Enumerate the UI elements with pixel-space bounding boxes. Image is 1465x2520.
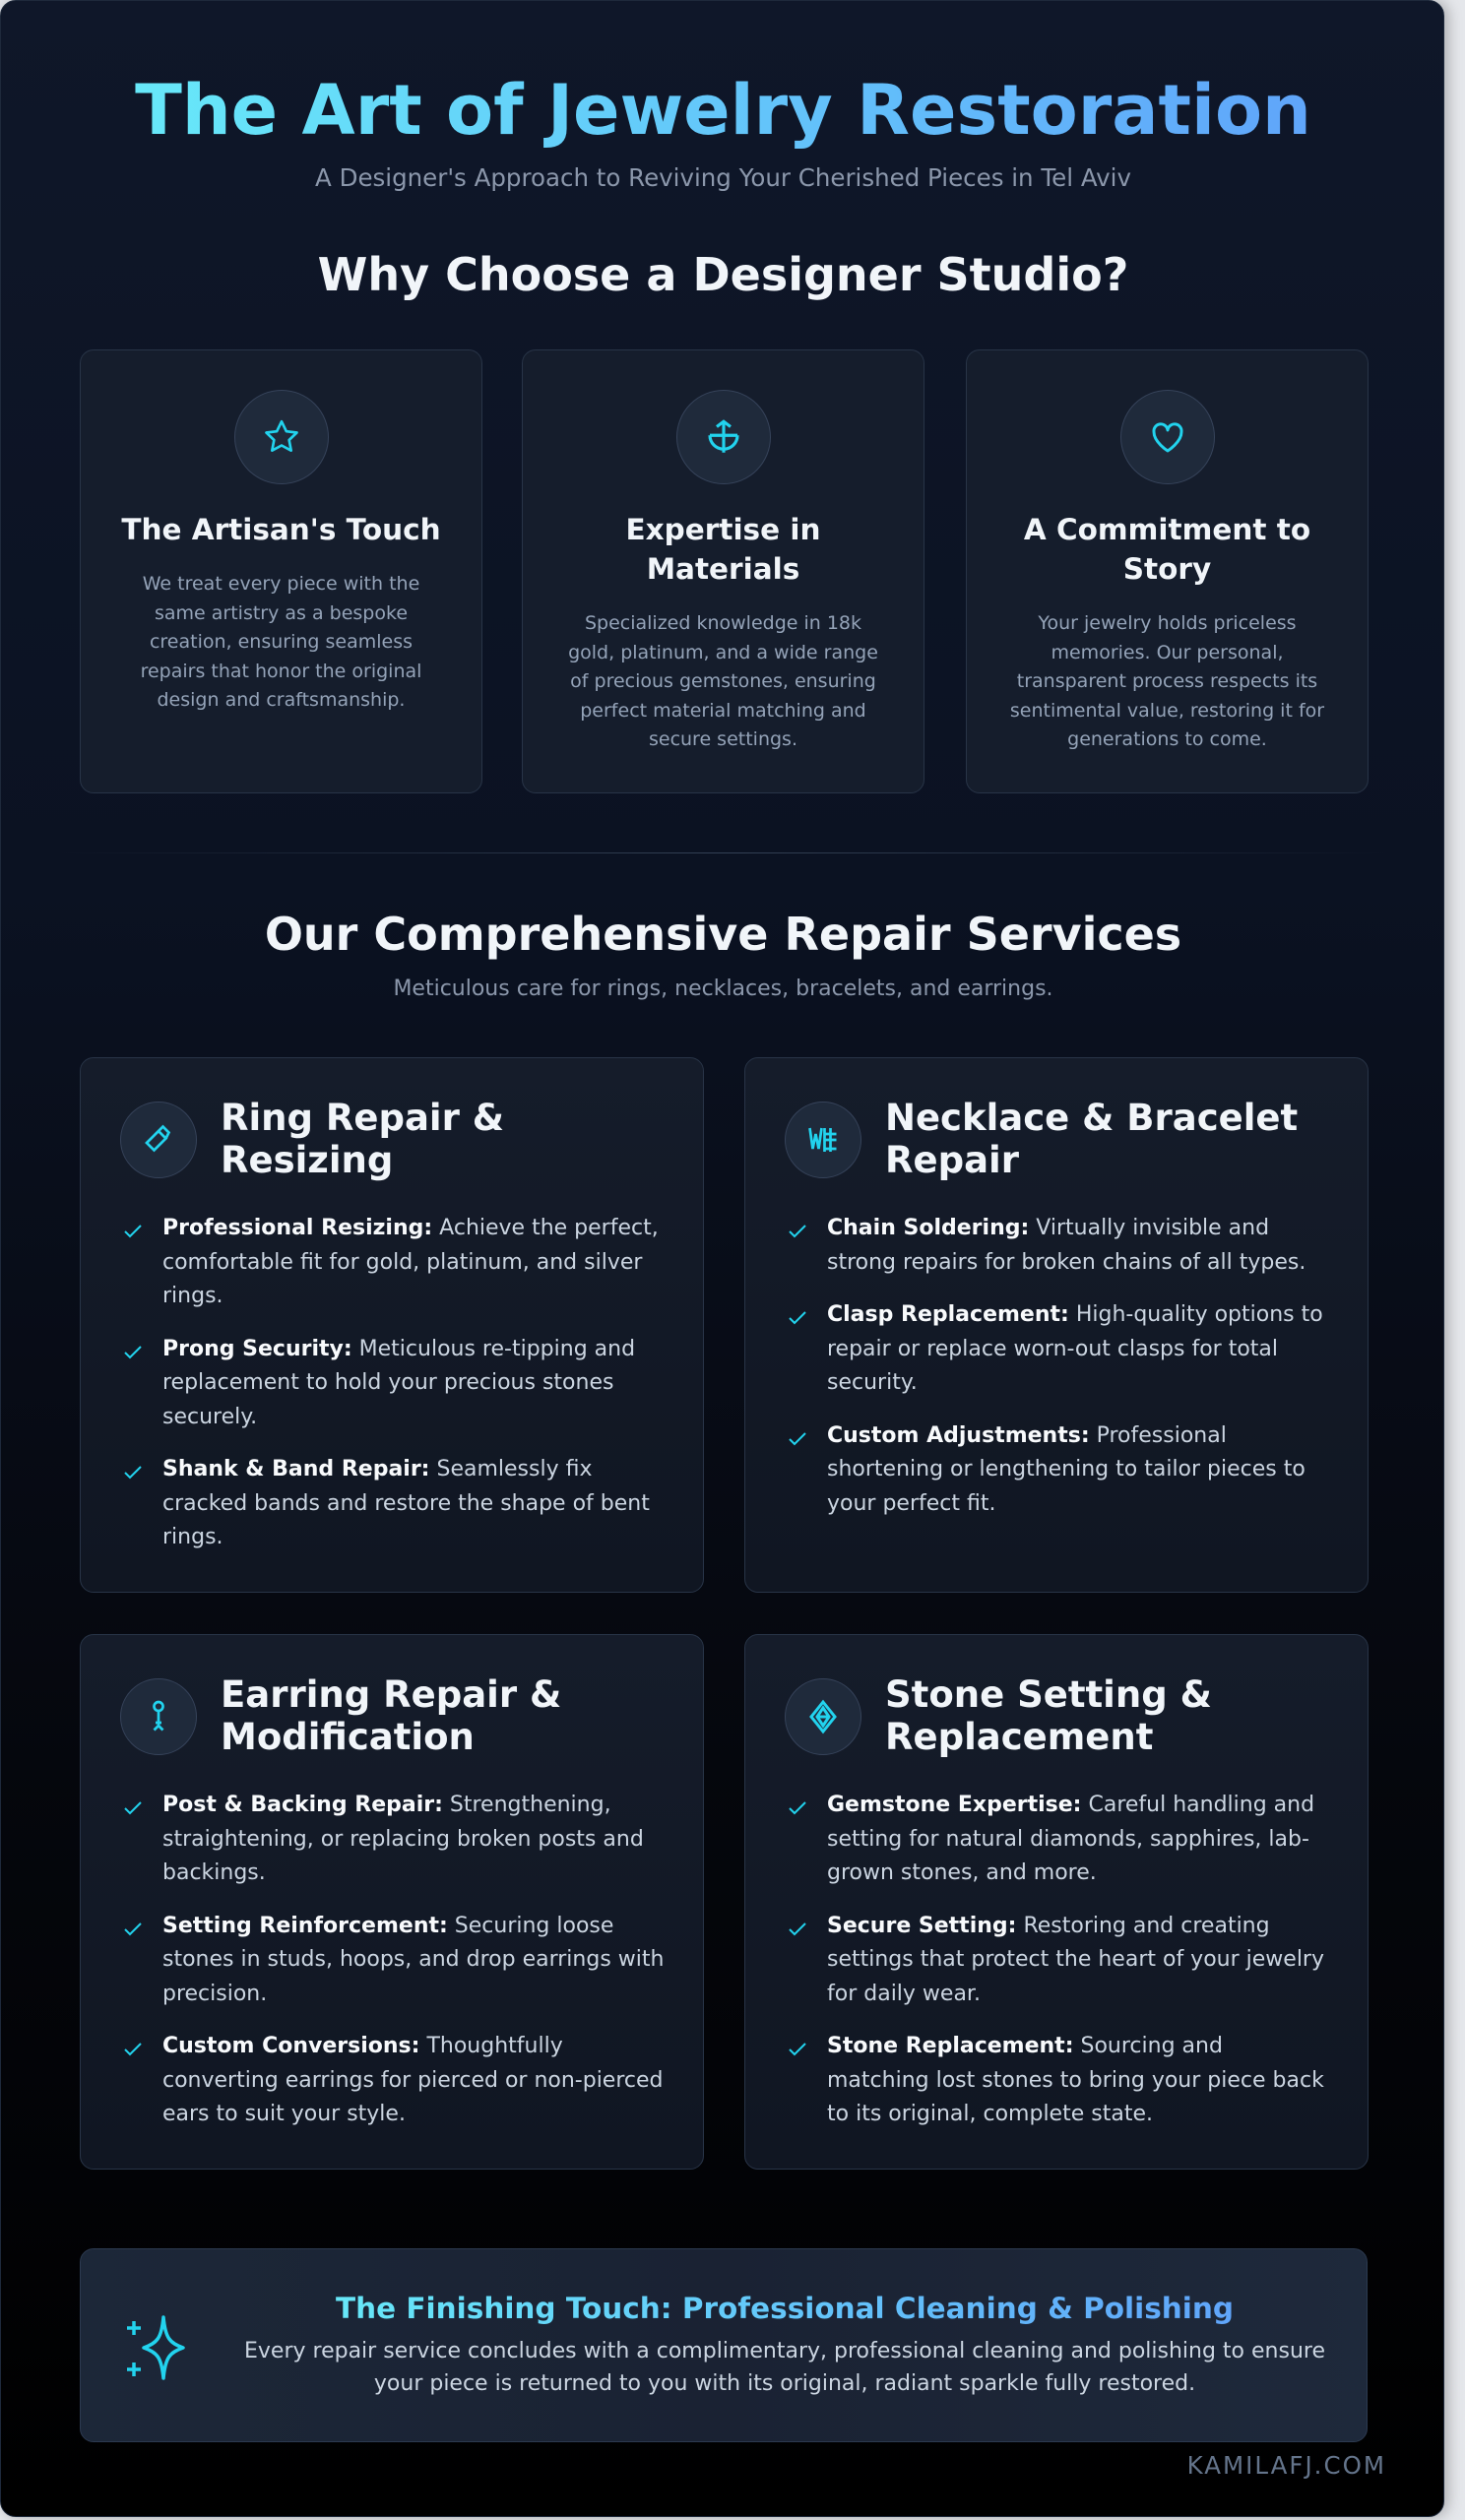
heading: why choose: Why Choose a Designer Studio? <box>318 248 1128 301</box>
panel: stone setting <box>744 1634 1369 2170</box>
services subtitle: Meticulous care for rings, necklaces, bracelets, and earrings. <box>393 976 1053 1001</box>
panel: ring repair: Shank & Band Repair: Seamlessly fix cracked bands and restore the shape of bent rings. <box>162 1457 650 1549</box>
footer: brand: KAMILAFJ.COM <box>1187 2451 1386 2480</box>
panel: earring repair: Earring Repair & Modification <box>221 1673 561 1758</box>
icon: gem <box>675 390 770 484</box>
panel: artisan's touch <box>80 349 482 793</box>
panel: artisan's touch: The Artisan's Touch <box>121 513 441 546</box>
panel: necklace repair: Custom Adjustments: Professional shortening or lengthening to tailor pieces to your perfect fit. <box>827 1423 1306 1516</box>
icon: diamond <box>785 1678 861 1755</box>
panel: stone setting: Gemstone Expertise: Careful handling and setting for natural diamonds, sapphires, lab-grown stones, and more. <box>827 1793 1314 1885</box>
heading: services: Our Comprehensive Repair Services <box>265 908 1181 961</box>
panel: expertise in materials <box>522 349 924 793</box>
panel: earring repair <box>80 1634 704 2170</box>
panel: expertise in materials: Specialized knowledge in 18k gold, platinum, and a wide range of precious gemstones, ensuring perfect material matching and secure settings. <box>568 612 878 750</box>
panel: commitment to story: Your jewelry holds priceless memories. Our personal, transparent process respects its sentimental value, restoring it for generations to come. <box>1010 612 1324 750</box>
panel: necklace repair <box>744 1057 1369 1593</box>
callout text: Every repair service concludes with a complimentary, professional cleaning and polishing to ensure your piece is returned to you with its original, radiant sparkle fully restored. <box>244 2339 1325 2396</box>
panel: stone setting: Stone Replacement: Sourcing and matching lost stones to bring your piece back to its original, complete state. <box>827 2034 1324 2126</box>
panel: expertise in materials: Expertise in Materials <box>625 513 821 586</box>
panel: commitment to story: A Commitment to Story <box>1024 513 1310 586</box>
icon: earring <box>120 1678 197 1755</box>
panel: ring repair: Prong Security: Meticulous re-tipping and replacement to hold your precious stones securely. <box>162 1337 635 1429</box>
callout title: The Finishing Touch: Professional Cleaning & Polishing <box>336 2292 1234 2325</box>
panel: necklace repair: Clasp Replacement: High-quality options to repair or replace worn-out clasps for total security. <box>827 1302 1323 1395</box>
panel: earring repair: Post & Backing Repair: Strengthening, straightening, or replacing broken posts and backings. <box>162 1793 644 1885</box>
panel: commitment to story <box>966 349 1369 793</box>
panel: necklace repair: Chain Soldering: Virtually invisible and strong repairs for broken chains of all types. <box>827 1216 1306 1274</box>
panel: earring repair: Setting Reinforcement: Securing loose stones in studs, hoops, and drop earrings with precision. <box>162 1914 664 2006</box>
icon: ring <box>120 1102 197 1178</box>
panel: ring repair: Professional Resizing: Achieve the perfect, comfortable fit for gold, platinum, and silver rings. <box>162 1216 659 1308</box>
icon: heart <box>1120 390 1215 484</box>
panel: earring repair: Custom Conversions: Thoughtfully converting earrings for pierced or non-pierced ears to suit your style. <box>162 2034 664 2126</box>
panel: ring repair <box>80 1057 704 1593</box>
panel: ring repair: Ring Repair & Resizing <box>221 1097 504 1181</box>
panel: stone setting: Stone Setting & Replacement <box>885 1673 1212 1758</box>
title: The Art of Jewelry Restoration <box>135 70 1311 151</box>
icon: star <box>234 390 329 484</box>
icon: chain <box>785 1102 861 1178</box>
panel: artisan's touch: We treat every piece with the same artistry as a bespoke creation, ensuring seamless repairs that honor the original design and craftsmanship. <box>141 573 421 711</box>
icon: sparkle <box>127 2315 185 2380</box>
panel: stone setting: Secure Setting: Restoring and creating settings that protect the heart of your jewelry for daily wear. <box>827 1914 1324 2006</box>
panel: necklace repair: Necklace & Bracelet Repair <box>885 1097 1298 1181</box>
subtitle: A Designer's Approach to Reviving Your Cherished Pieces in Tel Aviv <box>315 163 1131 192</box>
callout: finishing touch <box>80 2248 1368 2442</box>
